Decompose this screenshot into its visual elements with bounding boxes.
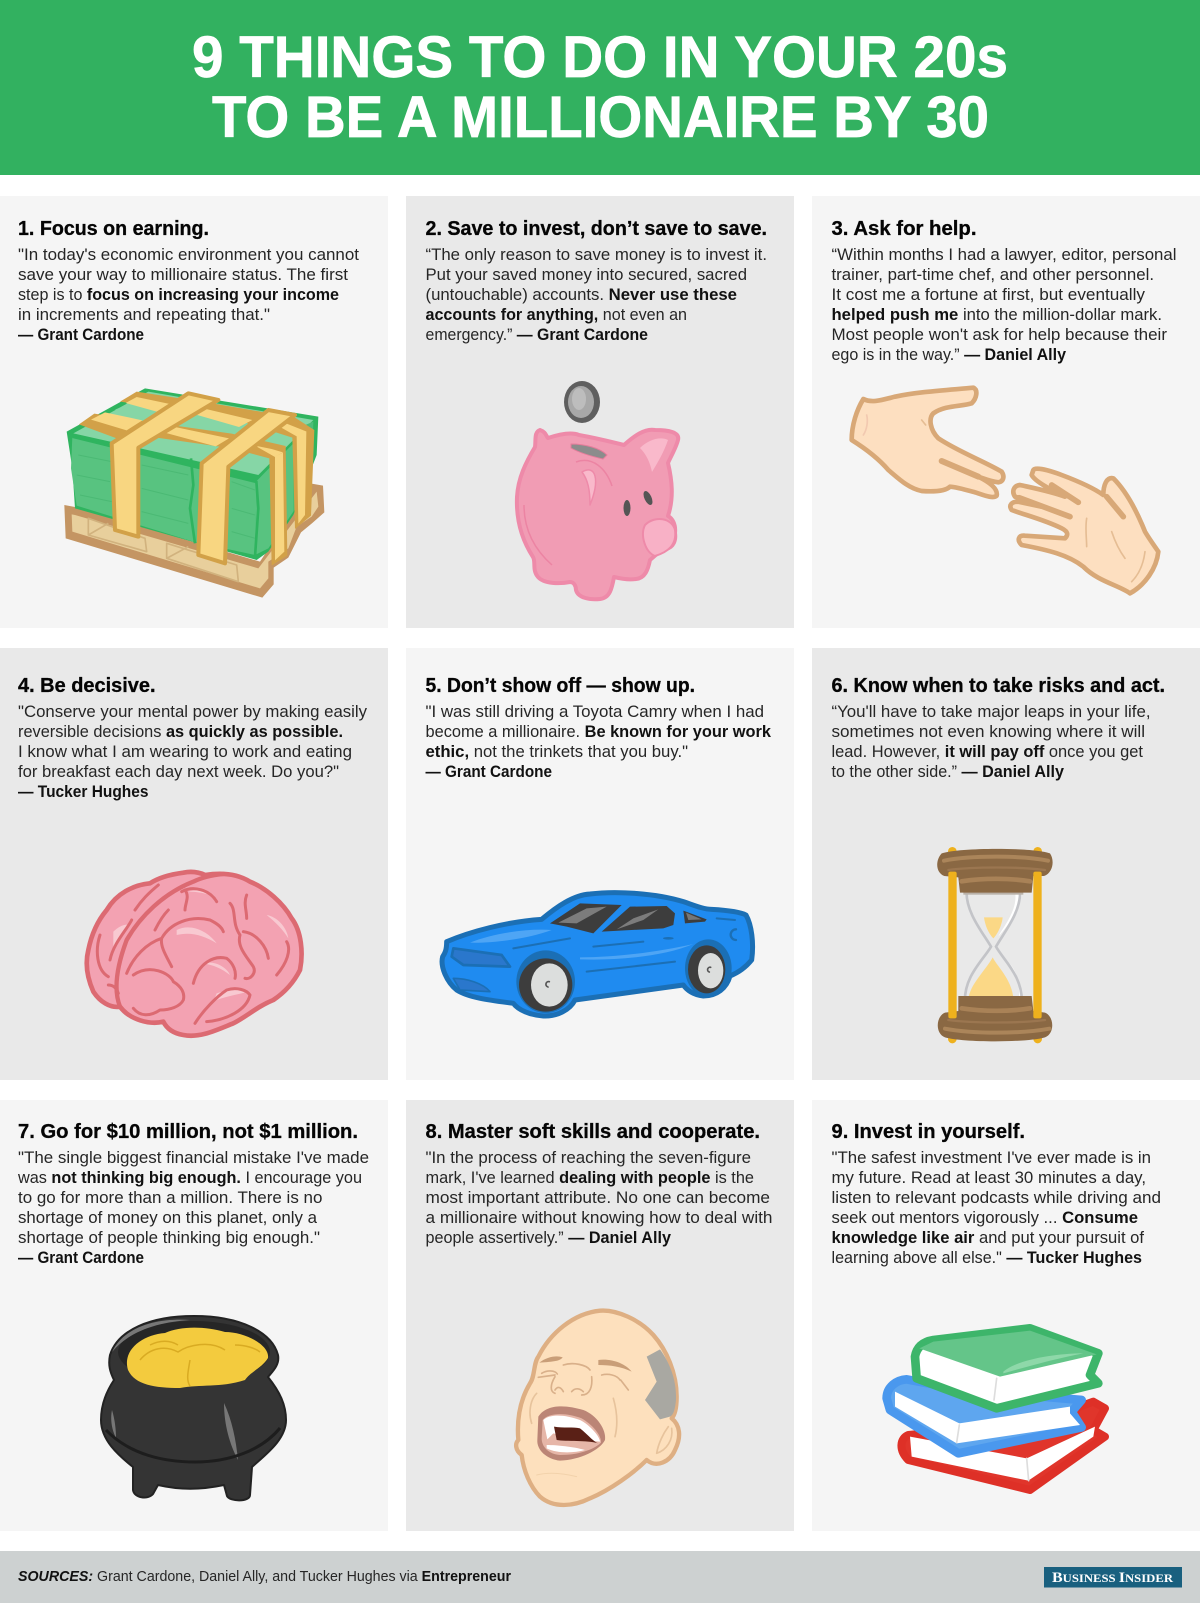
quote 9: listen to relevant podcasts while driving and xyxy=(832,1189,1161,1207)
quote 4 xyxy=(18,703,368,801)
header banner xyxy=(0,0,1200,175)
quote 4: for breakfast each day next week. Do you?" xyxy=(18,763,339,781)
quote 8: people assertively.” — Daniel Ally xyxy=(426,1229,671,1247)
quote 2: accounts for anything, not even an xyxy=(426,306,687,324)
heading 3: 3. Ask for help. xyxy=(832,218,976,240)
title xyxy=(192,25,1008,150)
quote 5: become a millionaire. Be known for your work xyxy=(426,723,772,741)
quote 9: knowledge like air and put your pursuit of xyxy=(832,1229,1145,1247)
quote 5: ethic, not the trinkets that you buy." xyxy=(426,743,688,761)
quote 9 xyxy=(832,1149,1161,1267)
quote 3: “Within months I had a lawyer, editor, personal xyxy=(832,246,1176,264)
footer bar xyxy=(0,1551,1200,1603)
quote 4: "Conserve your mental power by making easily xyxy=(18,703,368,721)
quote 4: I know what I am wearing to work and eating xyxy=(18,743,352,761)
quote 6 xyxy=(832,703,1150,781)
icon: blue car xyxy=(442,893,753,1016)
heading 4: 4. Be decisive. xyxy=(18,675,156,697)
quote 8: "In the process of reaching the seven-figure xyxy=(426,1149,751,1167)
quote 7: shortage of money on this planet, only a xyxy=(18,1209,317,1227)
quote 8 xyxy=(426,1149,772,1247)
icon: pallet of cash xyxy=(64,388,324,598)
title: 9 THINGS TO DO IN YOUR 20s xyxy=(192,25,1008,90)
quote 8: mark, I've learned dealing with people is the xyxy=(426,1169,754,1187)
quote 9: my future. Read at least 30 minutes a day, xyxy=(832,1169,1146,1187)
panel: 7 go for 10 million xyxy=(0,1100,388,1531)
title: TO BE A MILLIONAIRE BY 30 xyxy=(212,85,989,150)
icon: laughing face xyxy=(516,1311,679,1505)
quote 1: — Grant Cardone xyxy=(18,326,144,344)
heading 9: 9. Invest in yourself. xyxy=(832,1121,1025,1143)
quote 7: was not thinking big enough. I encourage you xyxy=(17,1169,362,1187)
business insider logo xyxy=(1044,1567,1182,1588)
quote 6: lead. However, it will pay off once you get xyxy=(832,743,1144,761)
quote 3 xyxy=(832,246,1176,364)
quote 8: most important attribute. No one can become xyxy=(426,1189,770,1207)
quote 9: learning above all else." — Tucker Hughes xyxy=(832,1249,1142,1267)
quote 6: to the other side.” — Daniel Ally xyxy=(832,763,1064,781)
quote 3: Most people won't ask for help because their xyxy=(832,326,1168,344)
quote 3: trainer, part-time chef, and other personnel. xyxy=(832,266,1154,284)
quote 3: helped push me into the million-dollar mark. xyxy=(832,306,1162,324)
quote 1: step is to focus on increasing your income xyxy=(18,286,339,304)
heading 8: 8. Master soft skills and cooperate. xyxy=(426,1121,760,1143)
quote 6: “You'll have to take major leaps in your life, xyxy=(832,703,1150,721)
quote 1: save your way to millionaire status. The first xyxy=(18,266,349,284)
quote 1: in increments and repeating that." xyxy=(18,306,270,324)
quote 5: — Grant Cardone xyxy=(426,763,552,781)
quote 4: — Tucker Hughes xyxy=(18,783,148,801)
sources text: SOURCES: Grant Cardone, Daniel Ally, and Tucker Hughes via Entrepreneur xyxy=(18,1568,511,1585)
quote 7 xyxy=(17,1149,369,1267)
quote 2: “The only reason to save money is to invest it. xyxy=(426,246,767,264)
quote 9: "The safest investment I've ever made is in xyxy=(832,1149,1151,1167)
icon: brain xyxy=(87,872,302,1036)
quote 3: ego is in the way.” — Daniel Ally xyxy=(832,346,1066,364)
heading 6: 6. Know when to take risks and act. xyxy=(832,675,1165,697)
heading 1: 1. Focus on earning. xyxy=(18,218,209,240)
heading 5: 5. Don’t show off — show up. xyxy=(426,675,695,697)
icon: hourglass xyxy=(937,847,1053,1043)
quote 2: Put your saved money into secured, sacred xyxy=(426,266,747,284)
heading 7: 7. Go for $10 million, not $1 million. xyxy=(18,1121,358,1143)
quote 6: sometimes not even knowing where it will xyxy=(832,723,1145,741)
quote 9: seek out mentors vigorously ... Consume xyxy=(832,1209,1138,1227)
panel: 5 dont show off xyxy=(406,648,794,1080)
quote 7: shortage of people thinking big enough." xyxy=(18,1229,320,1247)
quote 8: a millionaire without knowing how to deal with xyxy=(426,1209,772,1227)
heading 2: 2. Save to invest, don’t save to save. xyxy=(426,218,767,240)
panel: 6 take risks xyxy=(812,648,1200,1080)
icon: stack of books xyxy=(887,1328,1105,1490)
panel: 8 soft skills xyxy=(406,1100,794,1531)
panel: 9 invest in yourself xyxy=(812,1100,1200,1531)
panel: 2 save to invest xyxy=(406,196,794,628)
quote 2 xyxy=(426,246,767,344)
quote 1 xyxy=(18,246,360,344)
quote 4: reversible decisions as quickly as possible. xyxy=(18,723,343,741)
icon: pot of gold xyxy=(101,1316,286,1500)
panel: 1 focus on earning xyxy=(0,196,388,628)
quote 7: "The single biggest financial mistake I've made xyxy=(18,1149,369,1167)
icon: piggy bank xyxy=(517,430,678,599)
quote 7: — Grant Cardone xyxy=(18,1249,144,1267)
panel: 4 be decisive xyxy=(0,648,388,1080)
quote 2: (untouchable) accounts. Never use these xyxy=(426,286,737,304)
quote 5 xyxy=(426,703,772,781)
business insider logo: BUSINESS INSIDER xyxy=(1052,1570,1174,1586)
quote 5: "I was still driving a Toyota Camry when I had xyxy=(426,703,764,721)
quote 1: "In today's economic environment you cannot xyxy=(18,246,360,264)
icon: reaching hands xyxy=(852,388,1158,593)
quote 3: It cost me a fortune at first, but eventually xyxy=(832,286,1146,304)
quote 7: to go for more than a million. There is no xyxy=(18,1189,322,1207)
quote 2: emergency.” — Grant Cardone xyxy=(426,326,648,344)
panel: 3 ask for help xyxy=(812,196,1200,628)
icon: coin xyxy=(564,381,600,423)
